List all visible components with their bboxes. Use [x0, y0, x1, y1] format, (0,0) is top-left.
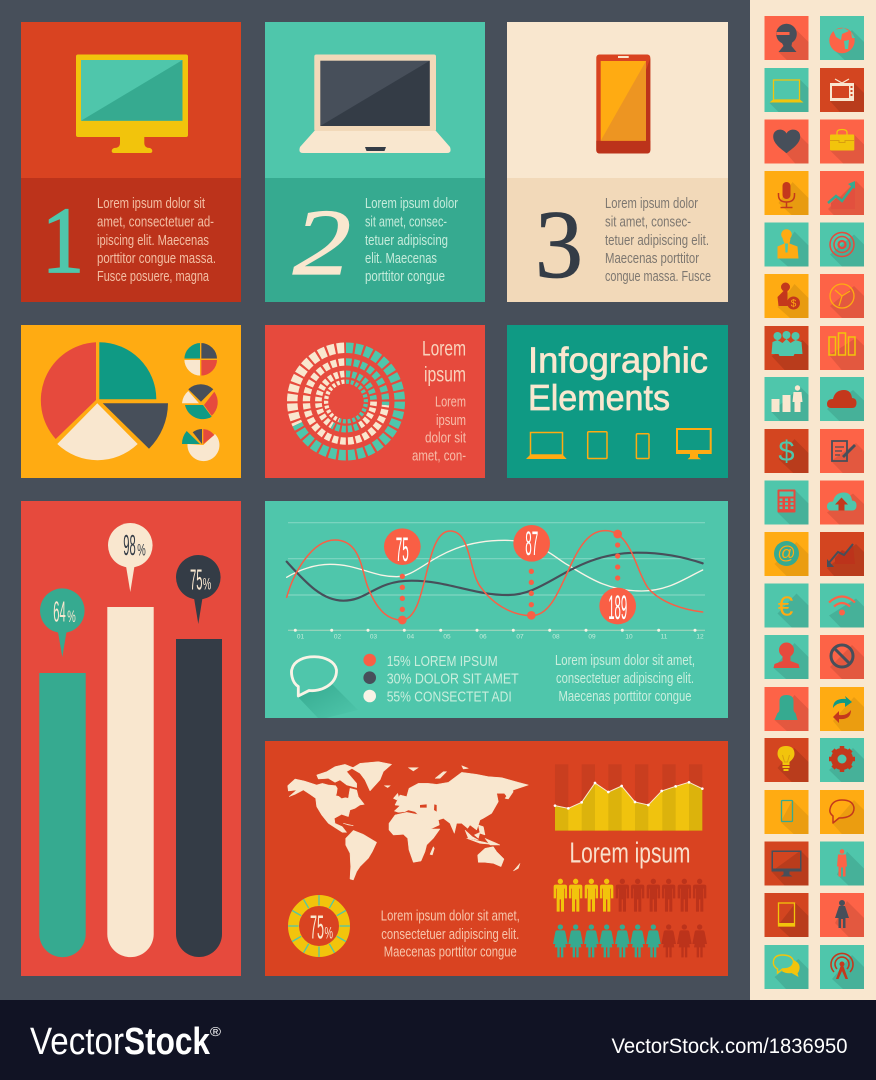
panel: title	[507, 325, 728, 478]
chart: small pie 1	[184, 342, 218, 376]
icon: desktop monitor	[76, 54, 188, 153]
icon: monitor outline	[764, 842, 808, 886]
icon: at sign: @	[777, 543, 796, 563]
axis labels: 06	[479, 634, 487, 640]
axis labels: 12	[696, 634, 704, 640]
text block: sit amet, consec-	[365, 214, 447, 230]
icon: clock	[820, 274, 864, 318]
icon: refresh arrows	[820, 687, 864, 731]
text block: Maecenas porttitor congue	[558, 689, 692, 705]
axis labels: 02	[334, 634, 341, 640]
text block: Lorem ipsum dolor	[605, 196, 698, 212]
callout values	[396, 525, 627, 627]
bar: 64 percent	[39, 588, 86, 957]
text block: Maecenas porttitor congue	[384, 945, 517, 961]
text block	[381, 909, 520, 961]
icon: calculator	[764, 480, 808, 524]
text block	[97, 196, 216, 285]
callout values: 87	[525, 525, 538, 563]
icon: laptop	[299, 54, 451, 153]
icon: tablet	[764, 893, 808, 937]
icon: binders	[820, 326, 864, 370]
axis labels: 03	[370, 634, 377, 640]
legend: 55% CONSECTET ADI	[387, 688, 512, 705]
icon: phone outline	[764, 790, 808, 834]
chart: area chart	[554, 764, 704, 831]
icon: small phone	[636, 434, 649, 458]
text block: consectetuer adipiscing elit.	[556, 671, 694, 687]
chart: donut 75 percent: 75	[310, 909, 324, 946]
panel: line chart	[265, 501, 728, 718]
bar: 75 percent: %	[203, 575, 211, 594]
icon: television	[820, 68, 864, 112]
axis labels: 04	[407, 634, 414, 640]
icon: dollar: $	[778, 436, 795, 468]
text block: ipiscing elit. Maecenas	[97, 233, 209, 249]
text block: Lorem ipsum dolor sit amet,	[381, 909, 520, 925]
logo: VectorStock	[30, 1021, 221, 1063]
icon: at sign	[764, 532, 808, 576]
icon: dollar	[764, 429, 808, 473]
title: Infographic	[528, 339, 708, 380]
icon: man figure	[820, 842, 864, 886]
text block: dolor sit	[425, 431, 466, 447]
axis labels: 09	[588, 634, 596, 640]
icon: speech bubble	[820, 790, 864, 834]
chart: small pie 3	[182, 429, 219, 461]
bar: 98 percent: %	[137, 540, 146, 559]
number 1: 1	[42, 189, 84, 293]
pictogram: men row	[554, 879, 706, 912]
number 3: 3	[535, 191, 583, 299]
panel: world map and stats	[265, 741, 728, 976]
text block: Lorem ipsum dolor	[365, 196, 458, 212]
panel: radial chart	[265, 325, 485, 478]
pictogram: women row	[553, 924, 707, 957]
text block: tetuer adipiscing elit.	[605, 233, 709, 249]
text block: Fusce posuere, magna	[97, 269, 210, 285]
bar: 64 percent: 64	[53, 597, 66, 629]
title: Elements	[528, 377, 670, 418]
icon: gear	[820, 738, 864, 782]
axis labels: 01	[297, 634, 304, 640]
text block: porttitor congue	[365, 269, 445, 285]
icon: cloud upload	[820, 480, 864, 524]
panel: laptop card 2	[265, 22, 485, 302]
logo: VectorStock: ®	[210, 1024, 221, 1039]
chart: three line series	[287, 523, 705, 640]
icon: team	[764, 326, 808, 370]
text block: Maecenas porttitor	[605, 251, 699, 267]
heading: ipsum	[424, 364, 466, 387]
icon: globe	[820, 16, 864, 60]
chart: small pie 2	[182, 384, 218, 419]
icon: businessman with coin: $	[791, 298, 797, 310]
text block	[365, 196, 458, 285]
callout values: 75	[396, 531, 409, 569]
axis labels	[297, 634, 704, 640]
icon: target	[820, 222, 864, 266]
icon: businessman with coin	[764, 274, 808, 318]
text block: sit amet, consec-	[605, 214, 691, 230]
icon: head with glasses	[764, 16, 808, 60]
icon: chat bubbles	[764, 945, 808, 989]
heading: Lorem ipsum	[570, 838, 690, 870]
text block: elit. Maecenas	[365, 251, 437, 267]
icon: laptop	[764, 68, 808, 112]
bar: 75 percent: 75	[190, 564, 202, 596]
axis labels: 07	[516, 634, 524, 640]
axis ticks	[294, 629, 696, 632]
text block: congue massa. Fusce	[605, 269, 711, 285]
icon: wifi	[820, 584, 864, 628]
icon: speech bubble	[292, 657, 358, 718]
chart: donut 75 percent: %	[324, 924, 333, 942]
panel: vertical bars	[21, 501, 241, 976]
text block: porttitor congue massa.	[97, 251, 216, 267]
legend	[363, 653, 519, 705]
legend: 15% LOREM IPSUM	[387, 653, 498, 670]
footer band	[0, 1000, 876, 1080]
icon: user	[764, 635, 808, 679]
number 2: 2	[293, 191, 351, 295]
icon: microphone	[764, 171, 808, 215]
icon: euro	[764, 584, 808, 628]
legend: 30% DOLOR SIT AMET	[387, 671, 519, 688]
chart: concentric rings	[292, 348, 400, 455]
icon: light bulb	[764, 738, 808, 782]
title	[528, 339, 708, 418]
text block: Lorem	[435, 395, 466, 411]
icon: cloud	[820, 377, 864, 421]
heading: Lorem	[422, 338, 466, 361]
axis labels: 11	[661, 634, 668, 640]
icon: small laptop	[526, 432, 567, 459]
icon: small monitor	[676, 428, 712, 459]
icon column background	[750, 0, 876, 1000]
icon: woman bust	[764, 687, 808, 731]
icon: briefcase	[820, 120, 864, 164]
chart: world map	[288, 762, 528, 880]
panel: monitor card 1	[21, 22, 241, 302]
bar: 98 percent: 98	[123, 530, 136, 562]
icon: no entry	[820, 635, 864, 679]
logo: VectorStock: Vector	[30, 1021, 124, 1063]
icon: notes with pencil	[820, 429, 864, 473]
text block: Lorem ipsum dolor sit amet,	[555, 653, 695, 669]
icon: euro: €	[778, 590, 794, 622]
text block: consectetuer adipiscing elit.	[381, 927, 519, 943]
logo: VectorStock: Stock	[124, 1021, 211, 1063]
bar: 64 percent: %	[67, 607, 76, 626]
text block: tetuer adipiscing	[365, 233, 448, 249]
bar: 98 percent	[107, 523, 154, 957]
icon: businessman	[764, 222, 808, 266]
icon: small tablet	[588, 432, 607, 458]
chart: large pie	[41, 342, 168, 460]
icon: heart	[764, 120, 808, 164]
panel: phone card 3	[507, 22, 728, 302]
axis labels: 05	[443, 634, 451, 640]
icon: broadcast tower	[820, 945, 864, 989]
icon: smartphone	[596, 54, 650, 154]
text block	[412, 395, 466, 465]
bar: 75 percent	[176, 555, 222, 957]
icon: rising chart	[820, 171, 864, 215]
icon: woman figure	[820, 893, 864, 937]
axis labels: 10	[625, 634, 633, 640]
chart: donut 75 percent	[288, 895, 350, 957]
text block	[605, 196, 711, 285]
image id: VectorStock.com/1836950	[612, 1035, 848, 1058]
icon: falling chart	[820, 532, 864, 576]
text block: ipsum	[436, 413, 466, 429]
icon: growth bars with man	[764, 377, 808, 421]
chart: three line series: 189	[608, 589, 627, 627]
text block	[555, 653, 695, 705]
panel: pie charts	[21, 325, 241, 478]
text block: amet, con-	[412, 449, 466, 465]
axis labels: 08	[552, 634, 560, 640]
text block: Lorem ipsum dolor sit	[97, 196, 205, 212]
heading	[422, 338, 466, 387]
icon grid	[764, 16, 876, 1021]
text block: amet, consectetuer ad-	[97, 214, 214, 230]
